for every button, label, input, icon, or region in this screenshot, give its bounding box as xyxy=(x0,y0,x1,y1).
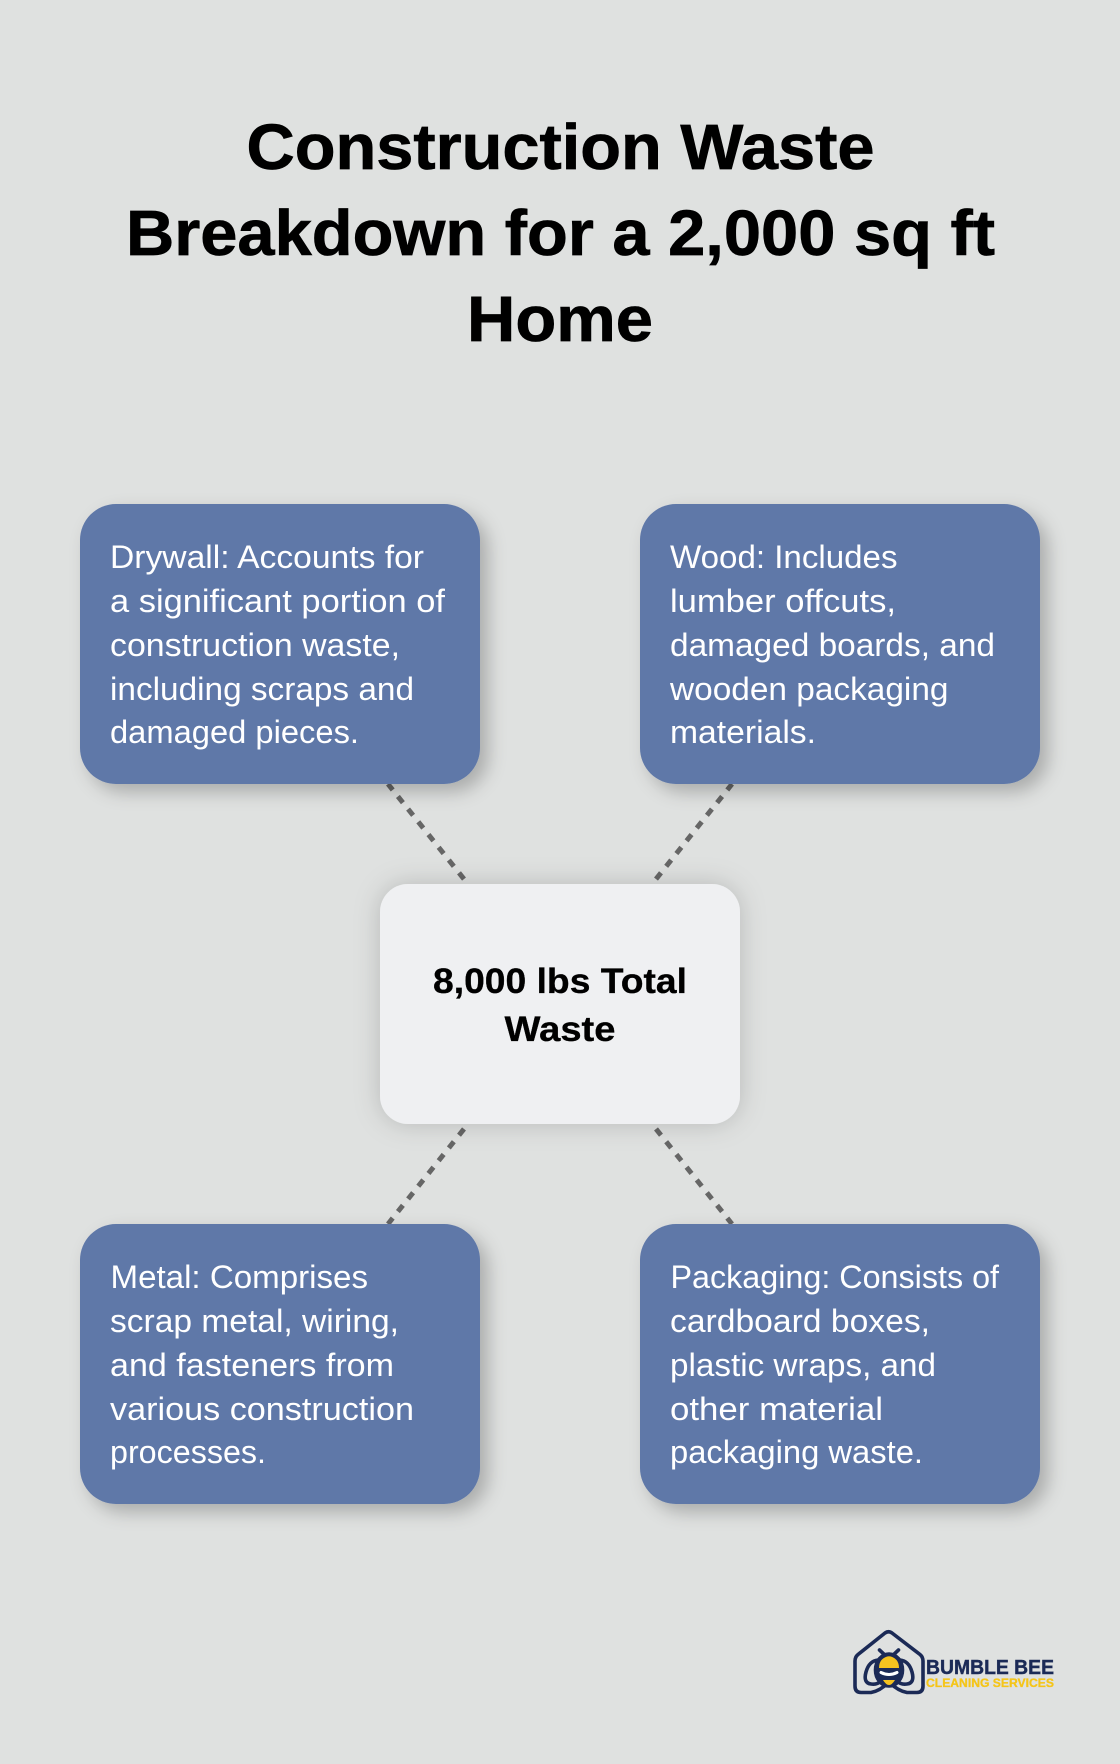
connector: metal to total xyxy=(388,1124,468,1224)
panel: drywall: Drywall: Accounts for xyxy=(110,539,424,575)
title: Home xyxy=(467,283,653,355)
panel: packaging xyxy=(640,1224,1040,1504)
title: Breakdown for a 2,000 sq ft xyxy=(126,197,995,269)
panel: metal: various construction xyxy=(110,1391,414,1427)
panel: total waste: 8,000 lbs Total xyxy=(433,962,687,1001)
title xyxy=(126,111,995,355)
panel: packaging: Packaging: Consists of xyxy=(670,1259,999,1295)
panel: drywall: damaged pieces. xyxy=(110,714,359,750)
panel: drywall: construction waste, xyxy=(110,627,400,663)
logo wordmark: BUMBLE BEE xyxy=(926,1657,1054,1679)
panel: wood: damaged boards, and xyxy=(670,627,995,663)
title: Construction Waste xyxy=(246,111,874,183)
panel: drywall xyxy=(80,504,480,784)
logo: Bumble Bee Cleaning Services xyxy=(855,1632,1054,1692)
panel: metal: and fasteners from xyxy=(110,1347,394,1383)
panel: wood: wooden packaging xyxy=(669,671,948,707)
panel: metal: scrap metal, wiring, xyxy=(110,1303,399,1339)
panel: metal xyxy=(80,1224,480,1504)
logo tagline: CLEANING SERVICES xyxy=(926,1678,1054,1690)
panel: total waste: Waste xyxy=(504,1010,616,1049)
icon: house and bee xyxy=(855,1632,923,1692)
panel: packaging: other material xyxy=(670,1391,883,1427)
panel: wood: lumber offcuts, xyxy=(670,583,896,619)
panel: drywall: a significant portion of xyxy=(110,583,445,619)
panel: packaging: cardboard boxes, xyxy=(670,1303,930,1339)
connector: drywall to total xyxy=(388,784,468,884)
connector: wood to total xyxy=(652,784,732,884)
panel: drywall: including scraps and xyxy=(110,671,414,707)
panel: wood xyxy=(640,504,1040,784)
panel: metal: processes. xyxy=(110,1434,266,1470)
panel: metal: Metal: Comprises xyxy=(110,1259,368,1295)
panel: wood: Wood: Includes xyxy=(670,539,898,575)
panel: packaging: packaging waste. xyxy=(670,1434,923,1470)
panel: wood: materials. xyxy=(670,714,816,750)
panel: packaging: plastic wraps, and xyxy=(670,1347,936,1383)
panel: total waste xyxy=(380,884,740,1124)
connector: packaging to total xyxy=(652,1124,732,1224)
